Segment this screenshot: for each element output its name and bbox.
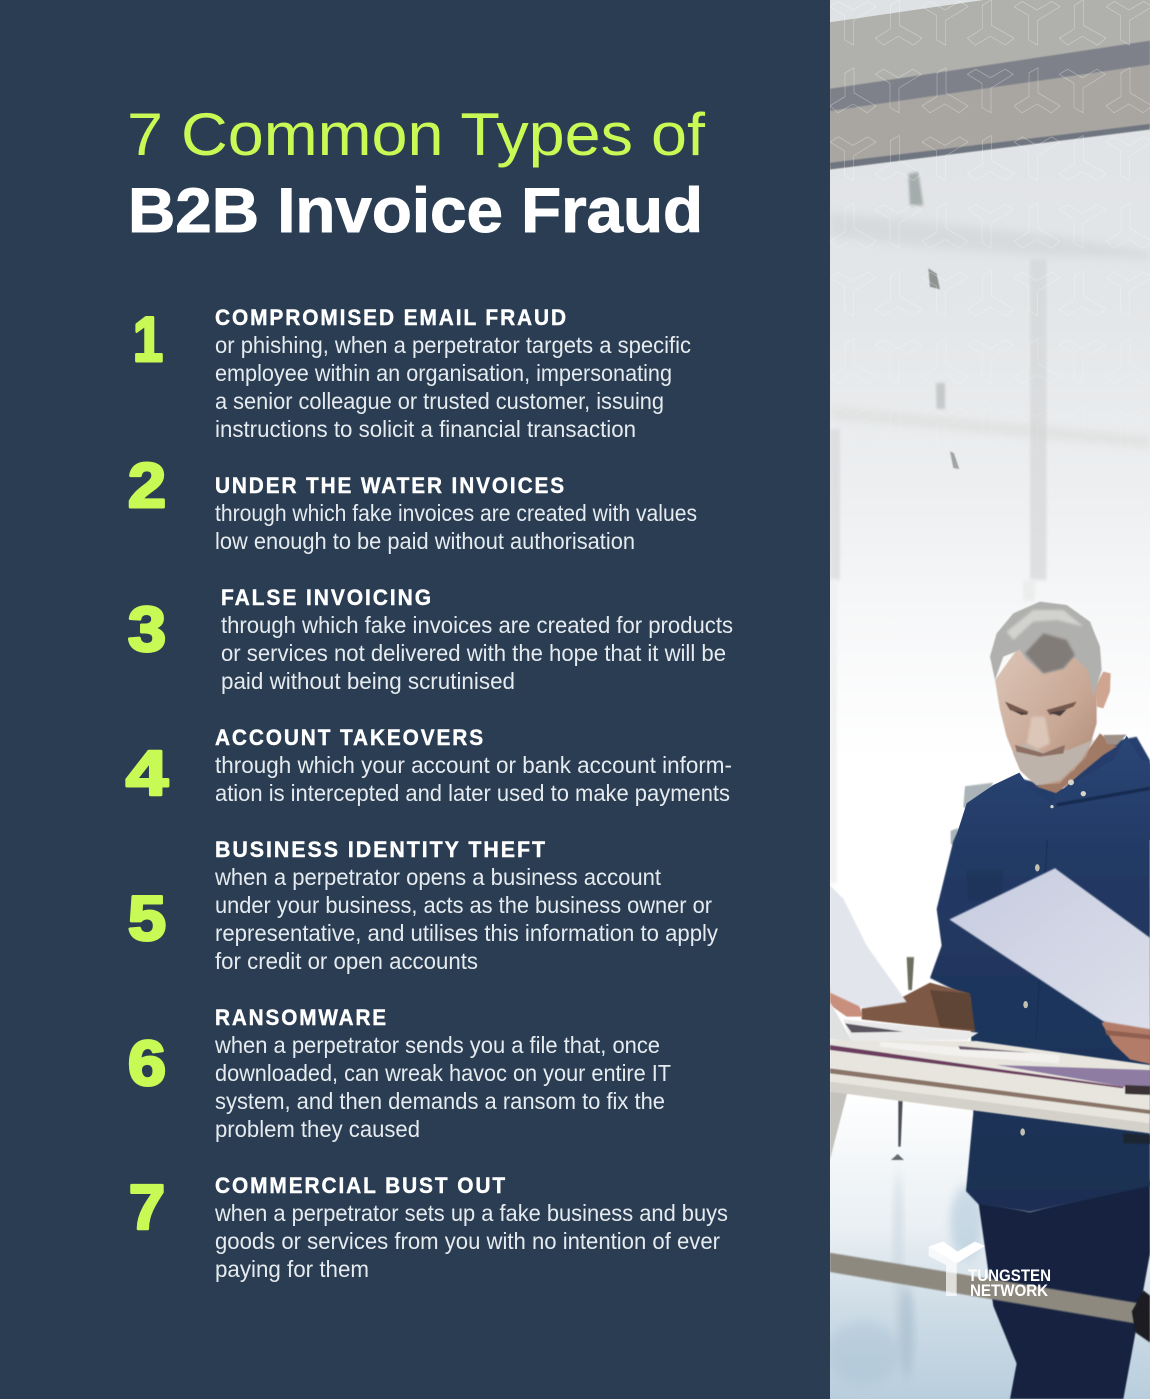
item 7: when a perpetrator sets up a fake business and buys bbox=[214, 1200, 728, 1226]
logo: Tungsten Network bbox=[929, 1241, 1051, 1300]
item 7: paying for them bbox=[215, 1256, 369, 1282]
item 1: or phishing, when a perpetrator targets a specific bbox=[215, 332, 691, 358]
title: 7 Common Types of bbox=[127, 101, 705, 168]
item 2: 2 bbox=[128, 451, 166, 521]
item 2: through which fake invoices are created with values bbox=[215, 500, 697, 526]
item 5: under your business, acts as the business owner or bbox=[215, 892, 712, 918]
item 1: 1 bbox=[133, 305, 163, 375]
item 6: when a perpetrator sends you a file that, once bbox=[214, 1032, 660, 1058]
item 7: goods or services from you with no intention of ever bbox=[215, 1228, 720, 1254]
geometric Y pattern overlay bbox=[830, 0, 1150, 366]
item 5: when a perpetrator opens a business account bbox=[214, 864, 662, 890]
item 6 bbox=[128, 1005, 671, 1142]
man's body bbox=[827, 580, 1150, 1399]
item 1: COMPROMISED EMAIL FRAUD bbox=[215, 305, 568, 330]
item 1: employee within an organisation, impersonating bbox=[215, 360, 672, 386]
item 3: paid without being scrutinised bbox=[221, 668, 515, 694]
photo: man reading documents at a standing desk bbox=[827, 0, 1150, 1399]
item 2: low enough to be paid without authorisation bbox=[215, 528, 635, 554]
item 3 bbox=[128, 585, 733, 694]
logo: Tungsten Network: NETWORK bbox=[970, 1281, 1049, 1300]
title: B2B Invoice Fraud bbox=[128, 176, 703, 246]
item 2 bbox=[128, 451, 697, 554]
documents held by the man bbox=[830, 868, 1150, 1029]
item 6: problem they caused bbox=[215, 1116, 420, 1142]
item 7: COMMERCIAL BUST OUT bbox=[215, 1173, 507, 1198]
item 4 bbox=[126, 725, 732, 809]
logo: Tungsten Network: TUNGSTEN bbox=[968, 1266, 1051, 1285]
item 3: or services not delivered with the hope that it will be bbox=[221, 640, 726, 666]
item 1: instructions to solicit a financial transaction bbox=[215, 416, 636, 442]
item 7: 7 bbox=[129, 1173, 165, 1243]
lower desk bar and clamp bbox=[830, 1253, 1150, 1343]
title bbox=[127, 101, 705, 246]
item 3: FALSE INVOICING bbox=[221, 585, 433, 610]
item 5: 5 bbox=[128, 884, 166, 954]
item 4: ACCOUNT TAKEOVERS bbox=[215, 725, 485, 750]
item 5 bbox=[128, 837, 718, 974]
item 6: 6 bbox=[128, 1029, 166, 1099]
item 4: 4 bbox=[126, 739, 168, 809]
arms and hands bbox=[830, 983, 1150, 1064]
item 5: BUSINESS IDENTITY THEFT bbox=[215, 837, 547, 862]
item 6: downloaded, can wreak havoc on your entire IT bbox=[215, 1060, 671, 1086]
background panel bbox=[0, 0, 830, 1399]
item 6: system, and then demands a ransom to fix the bbox=[215, 1088, 665, 1114]
item 2: UNDER THE WATER INVOICES bbox=[215, 473, 566, 498]
item 3: through which fake invoices are created for products bbox=[221, 612, 733, 638]
item 5: for credit or open accounts bbox=[215, 948, 478, 974]
item 1: a senior colleague or trusted customer, issuing bbox=[215, 388, 664, 414]
item 7 bbox=[129, 1173, 728, 1282]
head and face bbox=[955, 602, 1150, 840]
standing desk with laptop bbox=[830, 1002, 1150, 1160]
item 4: through which your account or bank account inform- bbox=[215, 752, 732, 778]
item 3: 3 bbox=[128, 595, 166, 665]
item 5: representative, and utilises this information to apply bbox=[215, 920, 718, 946]
item 4: ation is intercepted and later used to make payments bbox=[215, 780, 730, 806]
item 6: RANSOMWARE bbox=[215, 1005, 388, 1030]
item 1 bbox=[133, 305, 691, 442]
ceiling beams bbox=[830, 0, 1150, 580]
